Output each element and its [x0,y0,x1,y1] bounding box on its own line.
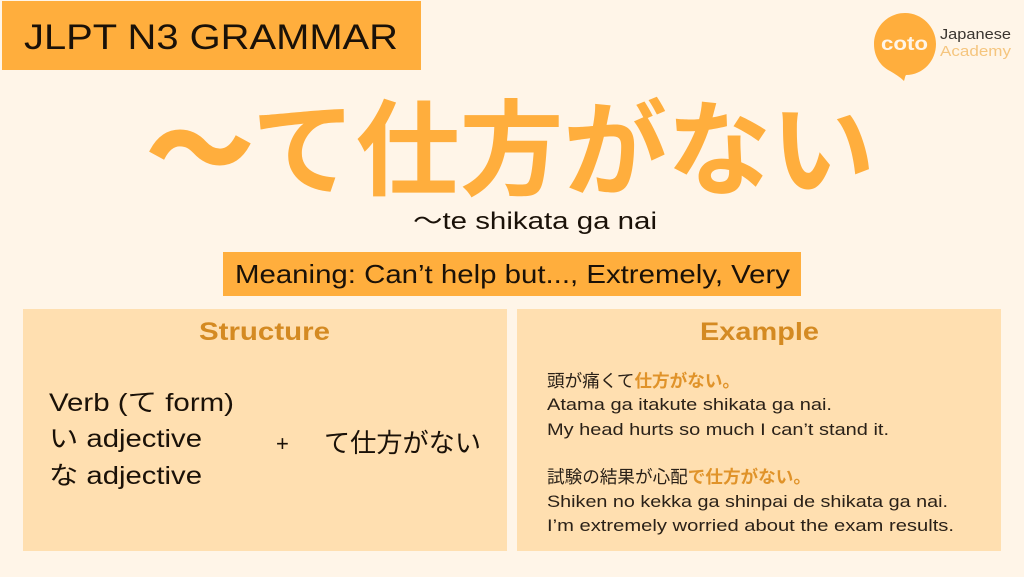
main title: 〜て仕方がない [148,66,875,217]
example 2 [547,464,954,535]
structure list: な adjective [49,462,202,490]
structure list: い adjective [49,425,202,453]
header badge: JLPT N3 Grammar [2,1,421,70]
plus sign: + [276,431,289,456]
logo: coto Japanese Academy: Academy [940,44,1012,60]
structure list [49,389,234,490]
header badge: JLPT N3 Grammar: JLPT N3 GRAMMAR [24,18,398,57]
example 1 [547,368,889,439]
panel: example [517,309,1001,551]
heading: example: Example [700,318,819,346]
logo: coto Japanese Academy: Japanese [940,27,1011,43]
panel: structure [23,309,507,551]
meaning banner [223,252,801,296]
structure list: Verb (て form) [49,389,234,417]
example 1: Atama ga itakute shikata ga nai. [547,395,832,414]
logo: coto Japanese Academy [874,13,1012,81]
example 2: 試験の結果が心配で仕方がない。 [547,464,811,489]
grammar pattern: て仕方がない [324,423,481,460]
logo: coto Japanese Academy: coto [881,34,928,55]
romaji subtitle: 〜te shikata ga nai [413,208,657,235]
heading: structure: Structure [199,318,330,346]
meaning banner: Meaning: Can’t help but..., Extremely, Very [235,259,790,289]
example 1: My head hurts so much I can’t stand it. [547,420,889,439]
example 1: 頭が痛くて仕方がない。 [547,368,740,393]
example 2: I’m extremely worried about the exam results. [547,516,954,535]
example 2: Shiken no kekka ga shinpai de shikata ga nai. [547,492,948,511]
